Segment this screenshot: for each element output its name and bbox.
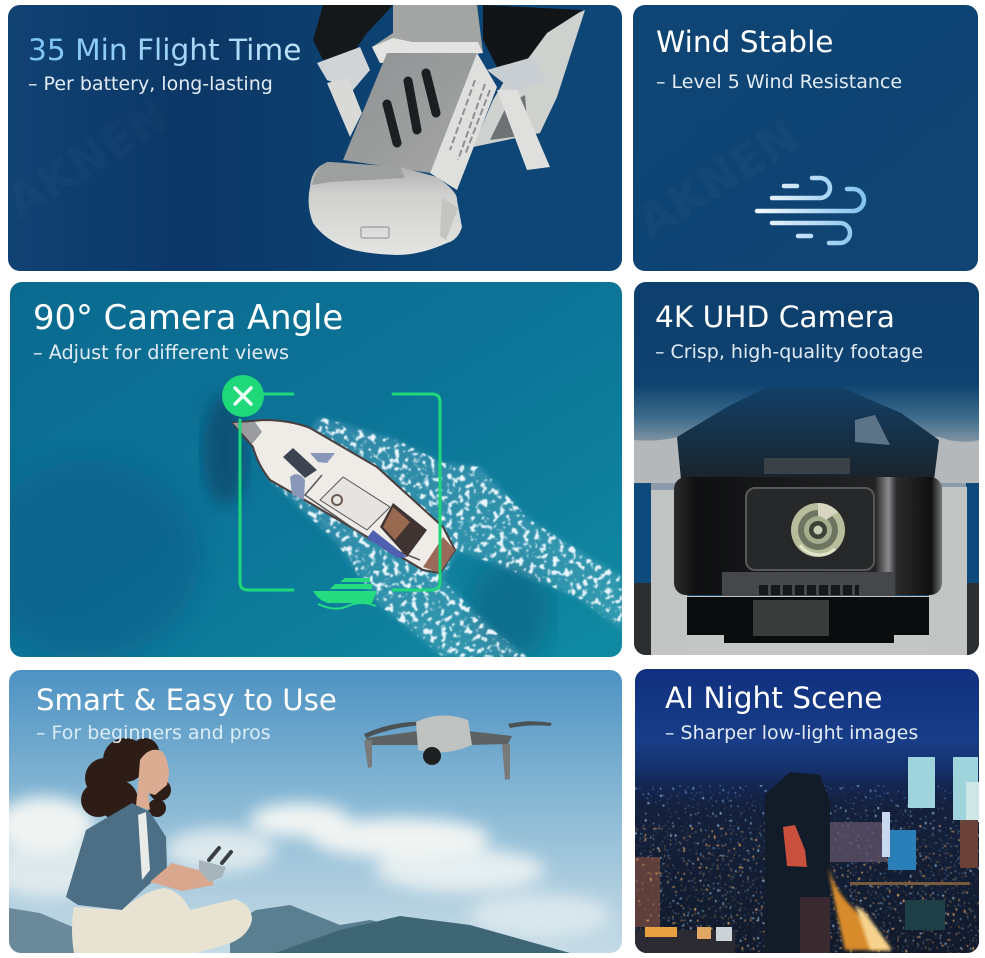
panel: camera angle <box>0 282 622 660</box>
hair <box>81 738 171 820</box>
heading: night scene: AI Night Scene <box>665 681 883 715</box>
vent grille <box>759 585 859 595</box>
heading: wind stable: Wind Stable <box>656 25 834 59</box>
drone <box>364 715 552 780</box>
heading: 4K camera: 4K UHD Camera <box>655 300 895 334</box>
panel: wind stable <box>627 5 978 271</box>
panel: night scene <box>635 669 979 953</box>
text: wind resistance: – Level 5 Wind Resistance <box>656 71 902 93</box>
text: battery note: – Per battery, long-lasting <box>28 73 273 95</box>
icon: wind <box>757 178 864 243</box>
text: footage: – Crisp, high-quality footage <box>655 341 923 363</box>
text: different views: – Adjust for different views <box>33 341 289 364</box>
heading: flight time: 35 Min Flight Time <box>28 33 301 67</box>
heading: smart: Smart & Easy to Use <box>36 683 337 717</box>
icon: camera lens <box>791 503 845 557</box>
boat <box>233 420 455 573</box>
person with controller <box>66 738 252 953</box>
panel: 4K camera <box>634 282 979 655</box>
panel: smart and easy <box>0 670 622 953</box>
text: beginners: – For beginners and pros <box>36 722 271 744</box>
icon: green close badge <box>222 375 264 417</box>
text: low-light: – Sharper low-light images <box>665 722 918 744</box>
icon: green ship <box>313 578 377 609</box>
target frame <box>240 394 440 590</box>
clouds <box>0 797 610 937</box>
boat wake <box>270 417 622 657</box>
mountains <box>9 905 570 953</box>
icon: drone underside with battery <box>309 5 585 255</box>
heading: camera angle: 90° Camera Angle <box>33 298 343 337</box>
night city <box>635 757 979 953</box>
drone gimbal <box>634 385 979 655</box>
panel: flight time <box>0 5 622 271</box>
